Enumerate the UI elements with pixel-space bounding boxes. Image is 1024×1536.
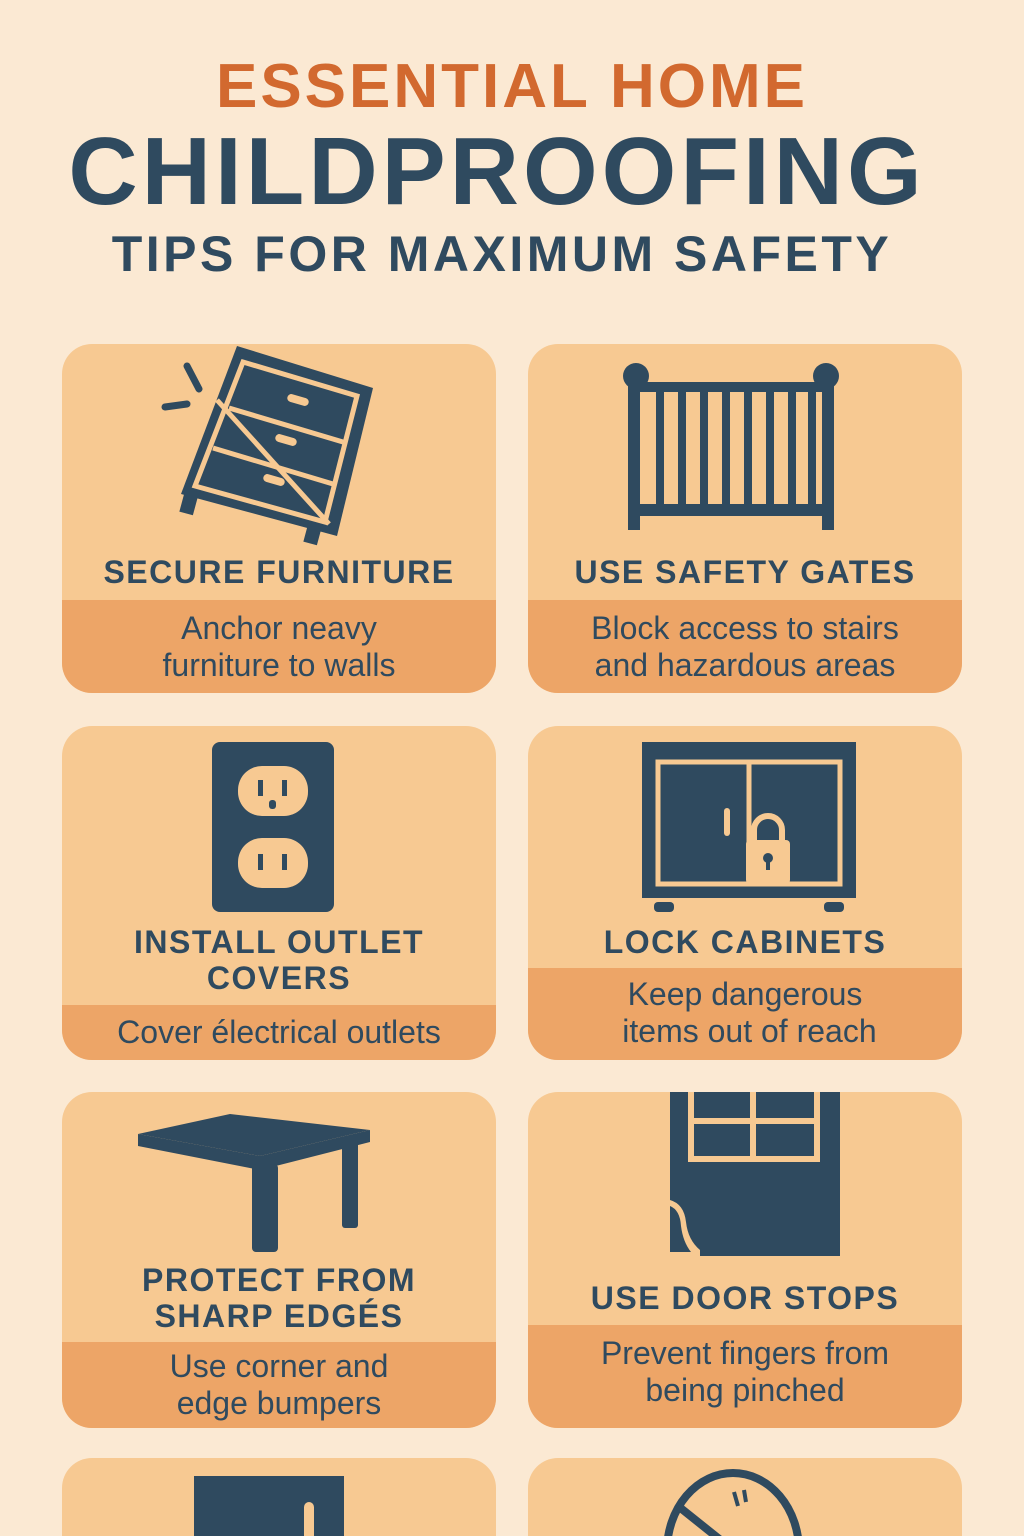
- heading: [142, 1262, 416, 1334]
- icon: gate: [623, 363, 839, 530]
- description: Block access to stairs: [591, 610, 899, 646]
- description: items out of reach: [622, 1013, 877, 1049]
- panel: lock cabinets: [528, 726, 962, 1060]
- description: Anchor neavy: [181, 610, 377, 646]
- heading: COVERS: [207, 960, 351, 996]
- description: [528, 968, 962, 1060]
- panel: bottom right (partial): [528, 1458, 962, 1536]
- description: and hazardous areas: [595, 647, 895, 683]
- description: [62, 600, 496, 693]
- title line 1: ESSENTIAL HOME: [216, 52, 808, 121]
- heading: [134, 924, 424, 996]
- description: furniture to walls: [162, 647, 395, 683]
- heading: INSTALL OUTLET: [134, 924, 424, 960]
- description: Prevent fingers from: [601, 1335, 889, 1371]
- icon: outlet: [212, 742, 334, 912]
- icon: table: [138, 1114, 370, 1252]
- description: Cover électrical outlets: [117, 1014, 441, 1050]
- heading: USE DOOR STOPS: [591, 1280, 899, 1316]
- heading: SECURE FURNITURE: [103, 554, 455, 590]
- panel: bottom left (partial): [62, 1458, 496, 1536]
- description: Keep dangerous: [628, 976, 862, 1012]
- heading: SHARP EDGÉS: [155, 1298, 403, 1334]
- icon: door: [670, 1092, 840, 1256]
- icon: tipping dresser: [162, 346, 373, 546]
- panel: door stops: [528, 1092, 962, 1428]
- heading: PROTECT FROM: [142, 1262, 416, 1298]
- icon: no-symbol: [664, 1469, 802, 1536]
- panel: safety gates: [528, 344, 962, 693]
- title: [68, 52, 926, 282]
- description: [62, 1005, 496, 1060]
- icon: door partial: [194, 1476, 344, 1536]
- title line 2: CHILDPROOFING: [68, 118, 926, 225]
- heading: LOCK CABINETS: [604, 924, 886, 960]
- panel: outlet covers: [62, 726, 496, 1060]
- panel: sharp edges: [62, 1092, 496, 1428]
- description: being pinched: [645, 1372, 845, 1408]
- icon: locked cabinet: [642, 742, 856, 912]
- description: Use corner and: [170, 1348, 388, 1384]
- heading: USE SAFETY GATES: [574, 554, 916, 590]
- description: [528, 1325, 962, 1428]
- panel: secure furniture: [62, 344, 496, 693]
- description: [62, 1342, 496, 1428]
- subtitle: TIPS FOR MAXIMUM SAFETY: [112, 226, 892, 282]
- description: edge bumpers: [177, 1385, 381, 1421]
- description: [528, 600, 962, 693]
